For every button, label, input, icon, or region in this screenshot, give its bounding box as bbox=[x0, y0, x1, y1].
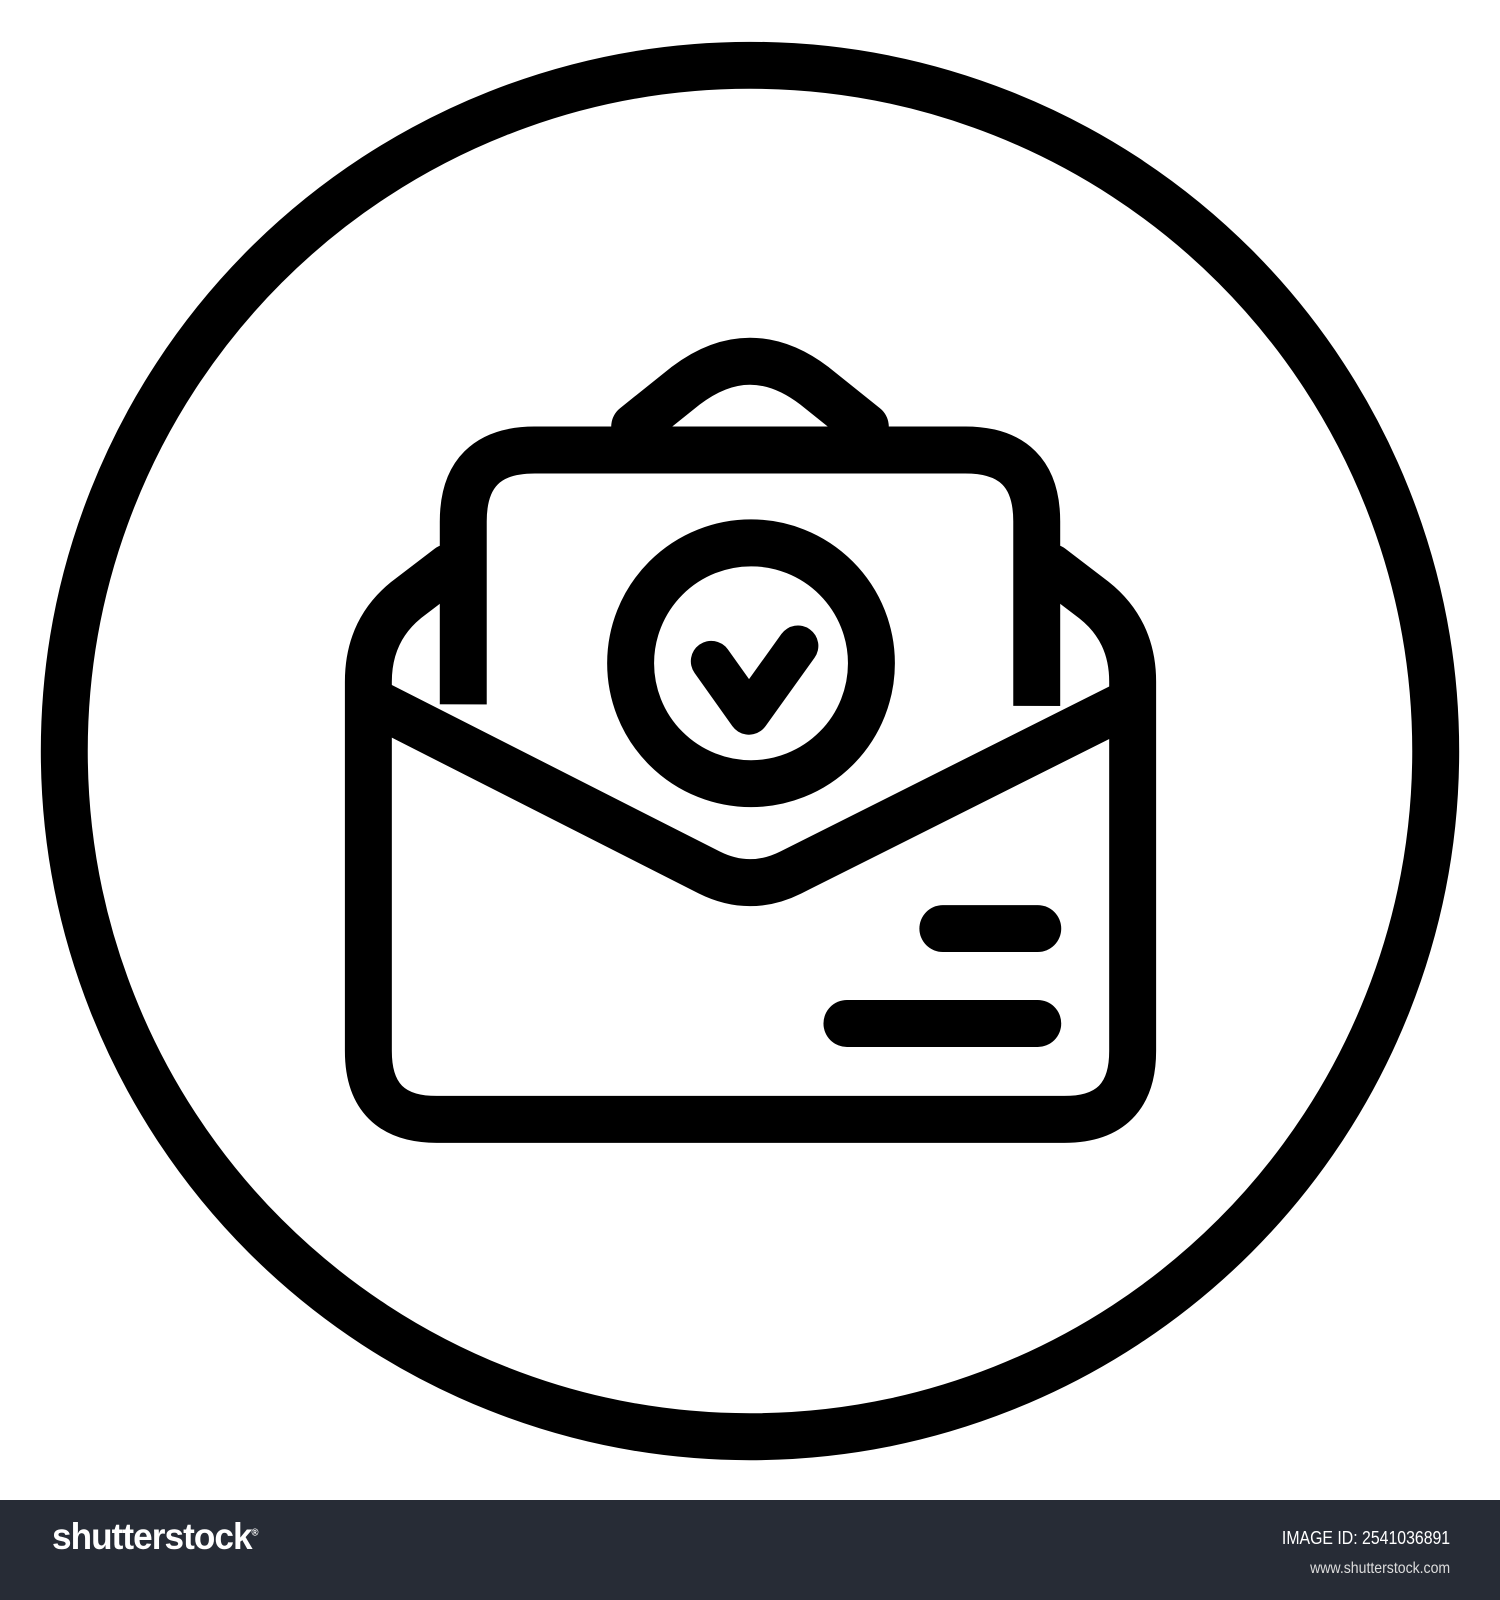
envelope bbox=[368, 361, 1133, 1119]
outer circle ring bbox=[64, 65, 1436, 1437]
footer bar bbox=[0, 1500, 1500, 1600]
image id: IMAGE ID: 2541036891 bbox=[1282, 1528, 1450, 1548]
footer logo: shutterstock® bbox=[52, 1516, 258, 1557]
website: www.shutterstock.com bbox=[1310, 1560, 1450, 1577]
